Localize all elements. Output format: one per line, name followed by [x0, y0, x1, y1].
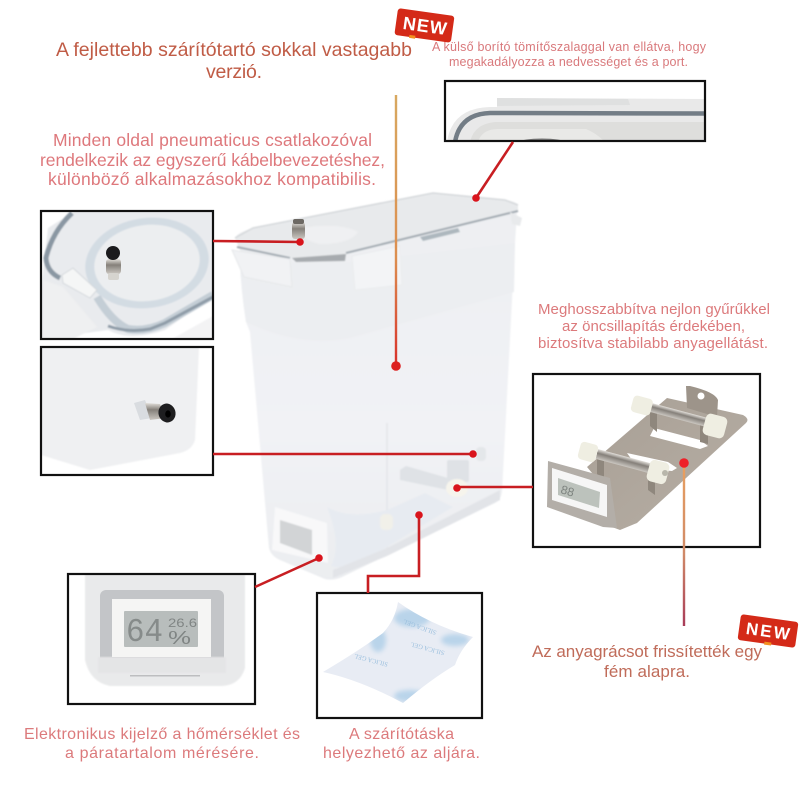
- lid: [235, 193, 518, 260]
- text block: electronic display: Elektronikus kijelző a hőmérséklet és: [24, 726, 300, 743]
- panel: silica gel pack photo: SILICA GEL: [410, 640, 445, 656]
- brackets: [650, 410, 708, 444]
- badge: new bottom: NEW: [745, 619, 792, 644]
- text block: electronic display: a páratartalom mérésére.: [65, 745, 259, 762]
- panel: silica gel pack photo: SILICA GEL: [402, 617, 438, 636]
- text block: drying bag: helyezhető az aljára.: [323, 745, 480, 762]
- steel plate: [587, 398, 747, 530]
- panel: thermometer photo: 26.6: [168, 616, 197, 630]
- panel: lid connector photo: [41, 210, 215, 339]
- arrow: rack to text: [679, 458, 689, 626]
- arrow: rack to container: [453, 484, 533, 492]
- text block: metal base: Az anyagrácsot frissítették egy: [532, 642, 762, 661]
- badge: new bottom: [737, 614, 799, 649]
- text block: drying bag: [323, 726, 480, 762]
- panel: thermometer photo: 64: [126, 614, 163, 651]
- thermometer: [547, 461, 617, 528]
- text block: sealing strip: [432, 40, 707, 69]
- text block: nylon rings: [538, 301, 770, 352]
- text block: metal base: [532, 642, 762, 681]
- text block: electronic display: [24, 726, 300, 762]
- clips: [232, 250, 292, 287]
- text block: pneumatic connectors: Minden oldal pneumaticus csatlakozóval: [53, 130, 372, 150]
- panel: metal rack photo: 88: [559, 482, 576, 500]
- panel: silica gel pack photo: [317, 593, 482, 718]
- arrow: side connector to container: [213, 450, 477, 458]
- arrow: lid seal to container: [472, 142, 513, 202]
- arrow: silica pack to container: [368, 511, 423, 593]
- text block: metal base: fém alapra.: [604, 662, 690, 681]
- text block: pneumatic connectors: [40, 130, 385, 189]
- arrow: central thicker wall: [391, 95, 401, 371]
- text block: nylon rings: Meghosszabbítva nejlon gyűrűkkel: [538, 301, 770, 318]
- text block: nylon rings: biztosítva stabilabb anyagellátást.: [538, 335, 768, 352]
- top fitting: [292, 222, 305, 239]
- title: thicker version: verzió.: [206, 61, 262, 83]
- text block: pneumatic connectors: rendelkezik az egyszerű kábelbevezetéshez,: [40, 150, 385, 170]
- text block: drying bag: A szárítótáska: [349, 726, 454, 743]
- panel: thermometer photo: %: [168, 628, 191, 648]
- text block: pneumatic connectors: különböző alkalmazásokhoz kompatibilis.: [48, 169, 376, 189]
- arrow: thermometer to container: [255, 554, 323, 587]
- thermometer in container: [272, 507, 328, 563]
- text block: sealing strip: A külső borító tömítőszalaggal van ellátva, hogy: [432, 40, 707, 54]
- panel: side connector photo: [41, 347, 213, 475]
- title: thicker version: A fejlettebb szárítótartó sokkal vastagabb: [56, 39, 412, 61]
- rollers: [648, 403, 706, 426]
- text block: nylon rings: az öncsillapítás érdekében,: [562, 318, 745, 335]
- bracket inside: [400, 447, 486, 490]
- panel: metal rack photo: [533, 374, 760, 547]
- panel: silica gel pack photo: SILICA GEL: [353, 652, 389, 668]
- illustration: drying container: [232, 193, 522, 580]
- badge: new top: [394, 8, 455, 44]
- text block: sealing strip: megakadályozza a nedvességet és a port.: [449, 55, 688, 69]
- title: thicker version: [56, 39, 412, 83]
- badge: new top: NEW: [402, 13, 448, 39]
- arrow: lid connector to container: [213, 238, 304, 246]
- panel: lid seal detail: [445, 81, 705, 146]
- panel: thermometer photo: [68, 574, 255, 704]
